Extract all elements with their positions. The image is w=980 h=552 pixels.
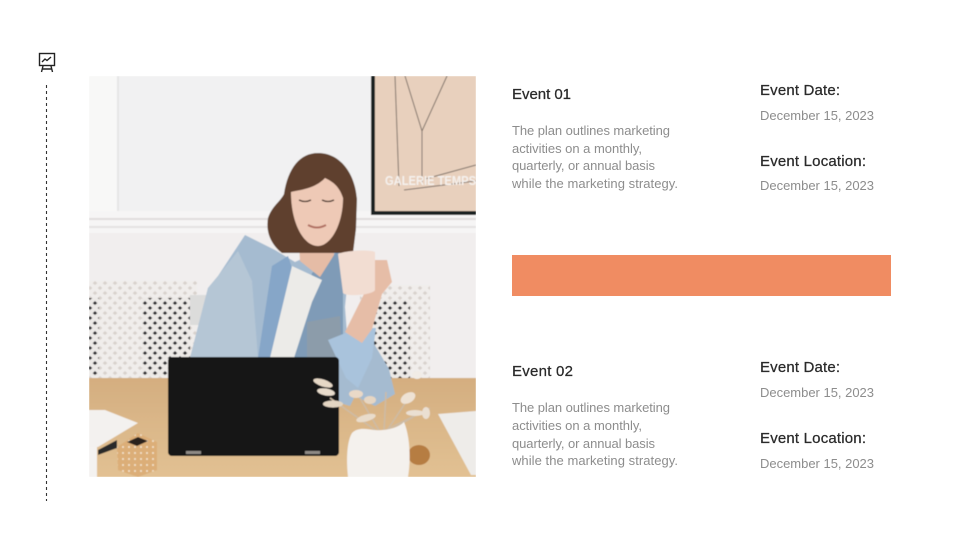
icon: presentation easel [40, 54, 54, 72]
hair back [267, 153, 357, 253]
event 02 description [511, 400, 678, 468]
orange divider band [512, 255, 891, 296]
event 01 location [760, 153, 874, 193]
event 01 date [760, 82, 874, 123]
event 01 date: Event Date: [760, 82, 840, 99]
event 02 location: December 15, 2023 [760, 456, 874, 471]
coaster [408, 445, 430, 465]
event 01 date: December 15, 2023 [760, 108, 874, 123]
event 02 location: Event Location: [760, 430, 866, 447]
event 02 heading: Event 02 [512, 363, 573, 380]
event 02 description: activities on a monthly, [512, 418, 642, 433]
event 02 details [511, 359, 874, 471]
radiator covers [89, 281, 430, 378]
event 01 description [511, 123, 678, 191]
timeline dashed line [46, 85, 48, 501]
jacket [219, 234, 396, 406]
t-shirt [270, 266, 322, 358]
event 01 description: activities on a monthly, [512, 141, 642, 156]
event 01 description: quarterly, or annual basis [512, 158, 656, 173]
event 02 location [760, 430, 874, 471]
mug [338, 251, 375, 295]
framed poster: GALERIE TEMPS [385, 174, 476, 188]
neck [299, 252, 334, 278]
table [89, 378, 476, 477]
event 01 description: while the marketing strategy. [511, 176, 678, 191]
event 02 description: The plan outlines marketing [512, 400, 670, 415]
vase with dried grass [312, 371, 430, 477]
event 02 date [760, 359, 874, 400]
face [291, 178, 343, 246]
wall panel moulding [89, 76, 476, 228]
event 01 location: Event Location: [760, 153, 866, 170]
books on table left [89, 410, 138, 477]
forearm and hand [345, 260, 392, 343]
event 01 heading: Event 01 [512, 86, 571, 103]
laptop [168, 357, 339, 456]
framed poster [371, 76, 476, 215]
photo: woman with mug at laptop [89, 76, 476, 477]
event 02 description: while the marketing strategy. [511, 453, 678, 468]
notebook on right [438, 411, 476, 475]
event 01 description: The plan outlines marketing [512, 123, 670, 138]
event 01 location: December 15, 2023 [760, 178, 874, 193]
pen holder [117, 433, 157, 477]
woman [190, 153, 395, 406]
event 02 description: quarterly, or annual basis [512, 436, 656, 451]
event 02 date: Event Date: [760, 359, 840, 376]
event 01 details [511, 82, 874, 193]
event 02 date: December 15, 2023 [760, 385, 874, 400]
